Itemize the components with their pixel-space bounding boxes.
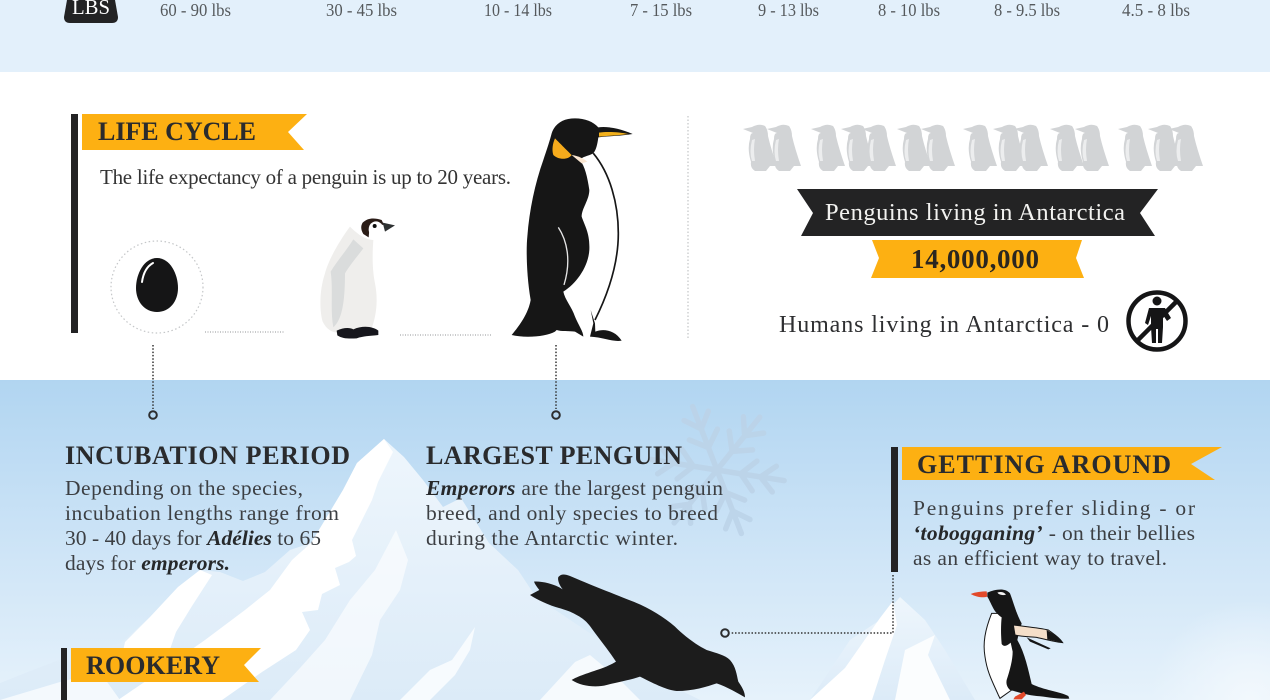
text block: largest penguin: Emperors are the largest penguin <box>425 476 723 500</box>
weight strip background <box>0 0 1270 72</box>
life expectancy text: The life expectancy of a penguin is up to 20 years. <box>100 165 511 189</box>
illustration: emperor penguin <box>512 118 633 341</box>
heading: getting around <box>902 447 1222 480</box>
text block: largest penguin: LARGEST PENGUIN <box>426 441 682 470</box>
heading: life cycle: LIFE CYCLE <box>98 117 256 146</box>
life cycle accent bar <box>71 114 78 333</box>
icon: LBS weight <box>64 0 118 23</box>
text block: incubation period: 30 - 40 days for Adélies to 65 <box>65 526 321 550</box>
banner: penguin count: 14,000,000 <box>911 244 1039 274</box>
divider <box>687 116 689 338</box>
rookery accent bar <box>61 648 67 700</box>
dotted connector: getting around to slider <box>721 575 893 637</box>
illustration: sliding penguin <box>530 574 745 697</box>
panel: getting around <box>891 447 1222 572</box>
weight ranges: 30 - 45 lbs <box>326 0 397 20</box>
text block: incubation period: days for emperors. <box>65 551 230 575</box>
panel: white life cycle band <box>0 72 1270 380</box>
weight ranges: 7 - 15 lbs <box>630 0 692 20</box>
dotted connector: largest penguin <box>552 345 560 419</box>
getting around text <box>913 496 1195 570</box>
text block: incubation period: incubation lengths range from <box>65 501 339 525</box>
weight ranges: 9 - 13 lbs <box>758 0 819 20</box>
weight ranges: 8 - 9.5 lbs <box>994 0 1060 20</box>
text block: largest penguin: during the Antarctic winter. <box>426 526 678 550</box>
mountains <box>0 439 1270 700</box>
heading: rookery <box>71 648 261 682</box>
weight ranges: 60 - 90 lbs <box>160 0 231 20</box>
getting around accent bar <box>891 447 898 572</box>
panel: sky <box>0 380 1270 700</box>
panel: rookery <box>61 648 261 700</box>
dotted connector: incubation <box>149 345 157 419</box>
icon: no humans <box>1128 292 1186 350</box>
humans count text: Humans living in Antarctica - 0 <box>779 312 1109 338</box>
panel: life cycle <box>71 114 633 341</box>
heading: rookery: ROOKERY <box>86 651 220 680</box>
icon: snowflake <box>647 401 787 539</box>
panel: Antarctica population <box>743 125 1203 349</box>
banner: penguins living <box>797 189 1158 236</box>
dotted link: egg to chick <box>205 331 285 333</box>
text block: incubation period: INCUBATION PERIOD <box>65 441 350 470</box>
getting around text: as an efficient way to travel. <box>913 546 1167 570</box>
text block: largest penguin: breed, and only species to breed <box>426 501 718 525</box>
heading: getting around: GETTING AROUND <box>917 450 1171 479</box>
icon: egg <box>111 241 203 333</box>
icon row: gray penguins <box>743 125 1203 171</box>
weight ranges: 10 - 14 lbs <box>484 0 552 20</box>
weight ranges: 8 - 10 lbs <box>878 0 940 20</box>
text block: incubation period <box>65 441 350 575</box>
getting around text: ‘tobogganing’ - on their bellies <box>913 521 1195 545</box>
text block: largest penguin <box>425 441 723 550</box>
banner: penguin count <box>871 240 1084 278</box>
banner: penguins living: Penguins living in Antarctica <box>825 199 1125 226</box>
dotted link: chick to adult <box>400 334 492 336</box>
illustration: gentoo penguin <box>971 589 1069 699</box>
weight ranges <box>160 0 1190 20</box>
getting around text: Penguins prefer sliding - or <box>913 496 1195 520</box>
illustration: chick <box>320 219 395 339</box>
heading: life cycle <box>82 114 307 150</box>
weight ranges: 4.5 - 8 lbs <box>1122 0 1190 20</box>
text block: incubation period: Depending on the species, <box>65 476 303 500</box>
